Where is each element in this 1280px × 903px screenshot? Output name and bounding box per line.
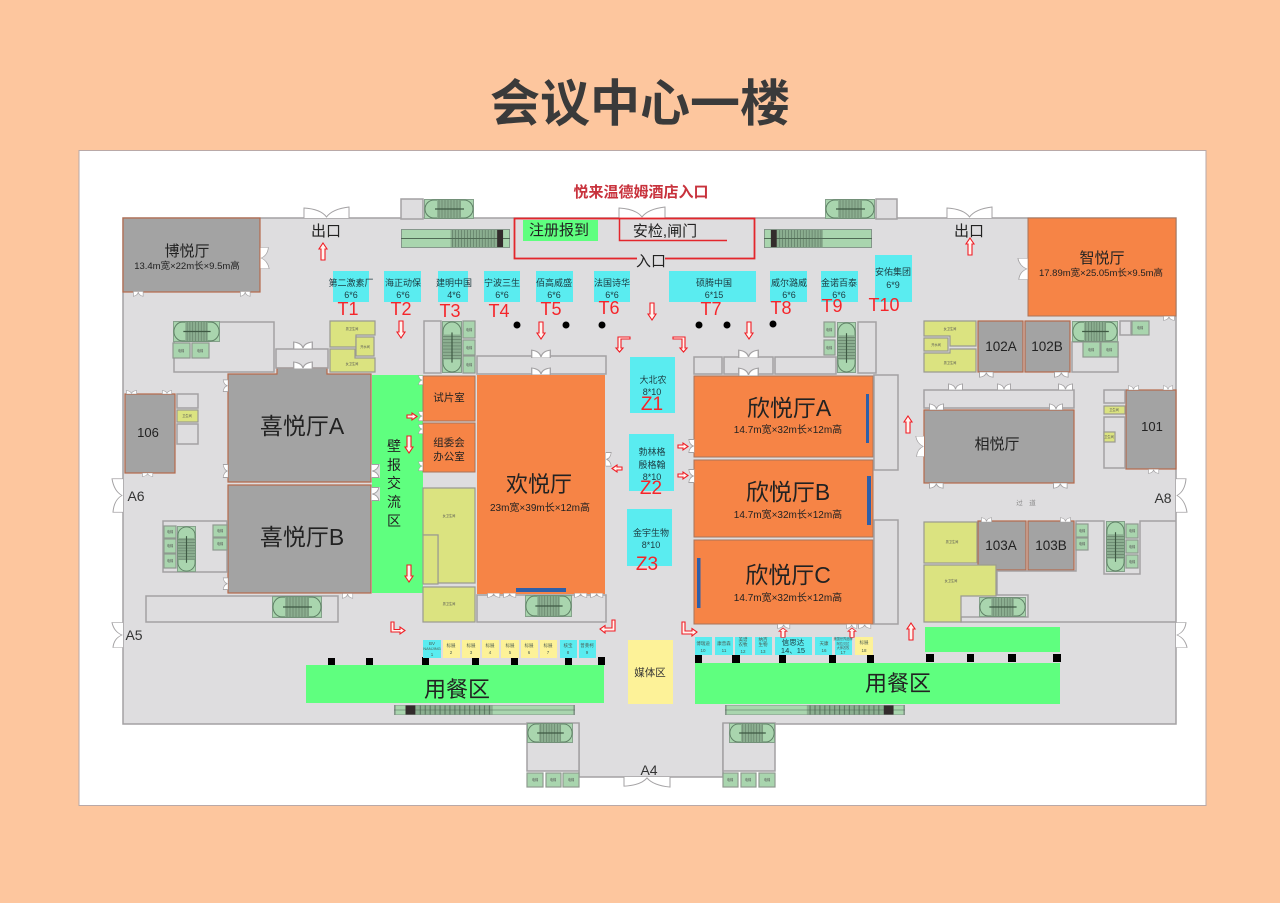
hall: 106: 106 xyxy=(137,425,159,440)
booth T4 xyxy=(484,271,520,321)
stairs and elevators: 电梯 xyxy=(1079,528,1086,533)
small booths right row: 农牧 xyxy=(738,641,748,648)
hall: 博悦厅 xyxy=(123,218,260,292)
room: 102B xyxy=(1025,321,1070,372)
small booths right row: 信思达 xyxy=(782,637,805,647)
poster exchange area: 报 xyxy=(387,457,401,473)
room: 组委会办公室 xyxy=(423,423,475,472)
hall: 喜悦厅A: 喜悦厅A xyxy=(260,413,345,439)
stairs and elevators: 电梯 xyxy=(217,528,224,533)
booth T9: 金诺百泰 xyxy=(821,277,857,288)
booth Z1: Z1 xyxy=(641,394,663,415)
hall: 欣悦厅B: 欣悦厅B xyxy=(746,479,830,505)
small booths left row: 4 xyxy=(489,650,492,655)
stairs and elevators: 电梯 xyxy=(727,777,734,782)
small booths left row: 2 xyxy=(450,650,453,655)
registration and security entrance: 注册报到 xyxy=(529,222,589,239)
room: 102A xyxy=(978,321,1023,372)
booth T10 xyxy=(868,255,912,315)
booth T3: 建明中国 xyxy=(436,277,472,288)
room: 102B: 102B xyxy=(1031,339,1063,354)
hall: 欣悦厅A: 14.7m宽×32m长×12m高 xyxy=(734,423,842,436)
booth T7: 硕腾中国 xyxy=(696,277,732,288)
booth T3: 4*6 xyxy=(447,290,461,300)
stairs and elevators: 电梯 xyxy=(826,345,833,350)
small booths left row: 3 xyxy=(470,650,473,655)
booth T9: 6*6 xyxy=(832,290,846,300)
small booths right row: 10 xyxy=(700,648,706,653)
arrows xyxy=(319,238,974,640)
booth T6: 6*6 xyxy=(605,290,619,300)
dining area left: 用餐区 xyxy=(424,677,490,702)
booth Z1 xyxy=(630,357,675,415)
exit labels: 出口 xyxy=(954,223,984,240)
room: 试片室: 试片室 xyxy=(433,391,465,404)
small booths left row: 5 xyxy=(509,650,512,655)
entrance doors and labels A4 A5 A6 A8: 过 道 xyxy=(1016,498,1036,507)
hall: 欣悦厅C: 14.7m宽×32m长×12m高 xyxy=(734,591,842,604)
stairs and elevators: 电梯 xyxy=(197,348,204,353)
room: 103A: 103A xyxy=(985,538,1017,553)
registration and security entrance: 入口 xyxy=(636,253,666,270)
booth T5: 6*6 xyxy=(547,290,561,300)
room: 102A: 102A xyxy=(985,339,1017,354)
hall: 相悦厅: 相悦厅 xyxy=(974,436,1020,453)
small booths right row: 天康 xyxy=(820,640,829,647)
stairs and elevators: 电梯 xyxy=(167,558,174,563)
registration and security entrance xyxy=(514,218,754,270)
restrooms: 卫生间 xyxy=(182,413,192,418)
restrooms: 男卫生间 xyxy=(944,360,956,365)
booth T4: 6*6 xyxy=(495,290,509,300)
stairs and elevators: 电梯 xyxy=(466,362,473,367)
hall: 博悦厅: 13.4m宽×22m长×9.5m高 xyxy=(134,260,240,272)
corridors and service rooms xyxy=(146,321,1176,771)
restrooms xyxy=(177,321,1125,622)
restrooms: 男卫生间 xyxy=(443,601,455,606)
booth Z3: Z3 xyxy=(636,554,658,575)
stairs and elevators: 电梯 xyxy=(1106,347,1113,352)
room: 101: 101 xyxy=(1141,419,1163,434)
booth T5 xyxy=(536,271,573,319)
title: 会议中心一楼 xyxy=(490,76,790,132)
small booths left row: 核宝 xyxy=(564,642,573,649)
booth T1: 6*6 xyxy=(344,290,358,300)
restrooms: 开水间 xyxy=(360,344,370,349)
stairs and elevators: 电梯 xyxy=(550,777,557,782)
top doors xyxy=(304,207,992,218)
hall: 欢悦厅 xyxy=(477,375,605,594)
restrooms: 女卫生间 xyxy=(944,326,956,331)
booth T10: 6*9 xyxy=(886,280,900,290)
hall: 欣悦厅B xyxy=(694,460,873,537)
dining area right: 用餐区 xyxy=(865,671,931,696)
small booths left row: 标展 xyxy=(506,642,515,649)
booth T8: 威尔潞威 xyxy=(771,277,807,288)
dining area left xyxy=(306,665,604,703)
booth T3 xyxy=(436,271,472,321)
booth Z1: 8*10 xyxy=(643,387,661,397)
hall: 欢悦厅: 23m宽×39m长×12m高 xyxy=(490,501,590,514)
small booths left row: 9 xyxy=(586,650,589,655)
poster exchange area: 壁 xyxy=(387,438,401,454)
booth Z1: 大北农 xyxy=(639,374,667,385)
floor base xyxy=(123,218,1176,777)
poster exchange area xyxy=(372,375,423,593)
booth T2: T2 xyxy=(390,299,412,319)
stairs and elevators: 电梯 xyxy=(167,529,174,534)
booth Z2: 8*10 xyxy=(643,472,661,482)
small doors xyxy=(126,247,1174,628)
restrooms: 女卫生间 xyxy=(945,578,957,583)
stairs and elevators: 电梯 xyxy=(745,777,752,782)
small booths right row: 18 xyxy=(861,648,867,653)
entrance doors and labels A4 A5 A6 A8 xyxy=(112,479,1187,787)
hall: 相悦厅 xyxy=(924,410,1074,483)
restrooms: 男卫生间 xyxy=(946,539,958,544)
hall: 欣悦厅C: 欣悦厅C xyxy=(745,562,831,588)
booth T2 xyxy=(384,271,421,319)
booth T7: T7 xyxy=(700,299,722,319)
media area: 媒体区 xyxy=(634,666,666,679)
room: 组委会办公室: 办公室 xyxy=(433,450,465,463)
hall: 欣悦厅C xyxy=(694,540,873,624)
small booths right row: 标展 xyxy=(860,639,869,646)
booth Z2: Z2 xyxy=(640,478,662,499)
small booths left row: 标展 xyxy=(466,642,476,649)
hall: 欣悦厅A: 欣悦厅A xyxy=(747,395,832,421)
hall: 106 xyxy=(125,394,175,473)
booth T6 xyxy=(594,271,630,318)
booth T4: T4 xyxy=(488,301,510,321)
booth Z2 xyxy=(629,434,674,499)
restrooms: 卫生间 xyxy=(1104,434,1114,439)
dining area right xyxy=(695,663,1060,704)
small booths left row: 标展 xyxy=(486,642,495,649)
stairs and elevators: 电梯 xyxy=(1088,347,1095,352)
pillars xyxy=(328,320,1061,665)
booth Z3: 8*10 xyxy=(642,540,660,550)
restrooms: 开水间 xyxy=(931,342,941,347)
hall: 智悦厅: 17.89m宽×25.05m长×9.5m高 xyxy=(1039,267,1163,279)
small booths left row: NANJING xyxy=(423,646,441,651)
booth T1: 第二激素厂 xyxy=(328,277,374,288)
room: 103B: 103B xyxy=(1035,538,1067,553)
room: 103B xyxy=(1028,521,1074,570)
exit labels: 出口 xyxy=(311,223,341,240)
registration and security entrance: 安检,闸门 xyxy=(633,223,697,240)
booth Z3: 金宇生物 xyxy=(633,527,669,538)
poster exchange area: 流 xyxy=(387,494,401,510)
small booths left row: 6 xyxy=(528,650,531,655)
booth T1 xyxy=(328,271,374,319)
booth T1: T1 xyxy=(337,299,359,319)
booth T9 xyxy=(821,271,858,316)
small booths right row: 康普森 xyxy=(717,640,731,647)
hall: 欣悦厅B: 14.7m宽×32m长×12m高 xyxy=(734,508,842,521)
hall: 喜悦厅A xyxy=(228,368,371,482)
small booths left row: 普莱柯 xyxy=(580,642,594,649)
stairs and elevators: 电梯 xyxy=(466,327,473,332)
booth T7 xyxy=(669,271,756,319)
booth Z2: 勃林格 xyxy=(638,446,666,457)
small booths right row: 14、15 xyxy=(781,646,805,655)
hotel entrance label: 悦来温德姆酒店入口 xyxy=(573,183,709,201)
small booths right row: 大师农牧 xyxy=(837,645,850,650)
stairs and elevators: 电梯 xyxy=(1079,541,1086,546)
small booths right row: 美谱 xyxy=(738,636,748,643)
small booths left row: BV xyxy=(429,641,435,646)
stairs and elevators: 电梯 xyxy=(1129,559,1136,564)
media area xyxy=(628,640,673,704)
small booths left row: 1 xyxy=(431,652,434,657)
stairs and elevators: 电梯 xyxy=(217,541,224,546)
stairs and elevators: 电梯 xyxy=(178,348,185,353)
booth T10: T10 xyxy=(868,295,900,315)
booth T6: T6 xyxy=(598,298,620,318)
stairs and elevators: 电梯 xyxy=(568,777,575,782)
room: 试片室 xyxy=(423,376,475,421)
dining area strip xyxy=(925,627,1060,652)
small booths right row: 纳百 xyxy=(758,636,768,643)
restrooms: 卫生间 xyxy=(1109,407,1119,412)
room: 组委会办公室: 组委会 xyxy=(433,436,465,449)
small booths left row: 标展 xyxy=(544,642,553,649)
booth T8 xyxy=(770,271,807,318)
small booths right row: 博瑞迪 xyxy=(696,640,710,647)
booth T7: 6*15 xyxy=(705,290,723,300)
booth T6: 法国诗华 xyxy=(594,277,630,288)
booth T5: 佰高威盛 xyxy=(536,277,572,288)
top stairs and escalators xyxy=(401,199,897,248)
small booths right row: 美国世界品牌 xyxy=(833,636,853,641)
stairs and elevators: 电梯 xyxy=(764,777,771,782)
hall: 欣悦厅A xyxy=(694,376,873,457)
hall: 智悦厅: 智悦厅 xyxy=(1079,249,1125,267)
booth T8: 6*6 xyxy=(782,290,796,300)
booth T4: 宁波三生 xyxy=(484,277,520,288)
poster exchange area: 交 xyxy=(387,475,401,491)
booth Z2: 殷格翰 xyxy=(638,459,666,470)
booth Z3 xyxy=(627,509,672,575)
hall: 智悦厅 xyxy=(1028,218,1176,316)
small booths right row: 16 xyxy=(821,648,827,653)
hall: 博悦厅: 博悦厅 xyxy=(164,243,210,260)
stairs and elevators: 电梯 xyxy=(532,777,539,782)
small booths left row: 8 xyxy=(567,650,570,655)
booth T8: T8 xyxy=(770,298,792,318)
small booths left row xyxy=(423,640,596,658)
entrance doors and labels A4 A5 A6 A8: A5 xyxy=(125,627,143,643)
small booths left row: 标展 xyxy=(446,642,456,649)
booth T2: 海正动保 xyxy=(385,277,421,288)
stairs and elevators xyxy=(164,321,1149,787)
exit labels xyxy=(311,223,984,240)
stairs and elevators: 电梯 xyxy=(826,327,833,332)
stairs and elevators: 电梯 xyxy=(1137,325,1144,330)
entrance doors and labels A4 A5 A6 A8: A6 xyxy=(127,488,145,504)
small booths right row: 13 xyxy=(760,649,766,654)
small booths left row: 标展 xyxy=(524,642,534,649)
room: 103A xyxy=(978,521,1026,570)
small booths right row: 17 xyxy=(840,650,846,655)
booth T3: T3 xyxy=(439,301,461,321)
restrooms: 女卫生间 xyxy=(346,361,358,366)
booth T5: T5 xyxy=(540,299,562,319)
small booths right row xyxy=(695,636,873,655)
floor plan card xyxy=(79,150,1206,806)
stairs and elevators: 电梯 xyxy=(1129,544,1136,549)
small booths left row: 7 xyxy=(547,650,550,655)
small booths right row: 阿拉贝拉 xyxy=(837,641,850,646)
poster exchange area: 区 xyxy=(387,513,401,529)
stairs and elevators: 电梯 xyxy=(466,345,473,350)
entrance doors and labels A4 A5 A6 A8: A4 xyxy=(640,762,658,778)
hall: 喜悦厅B xyxy=(228,485,371,593)
stairs and elevators: 电梯 xyxy=(167,543,174,548)
restrooms: 男卫生间 xyxy=(346,326,358,331)
small booths right row: 生物 xyxy=(758,641,768,648)
small booths right row: 11 xyxy=(722,648,727,653)
hall: 喜悦厅B: 喜悦厅B xyxy=(260,524,344,550)
booth T2: 6*6 xyxy=(396,290,410,300)
room: 101 xyxy=(1126,390,1176,469)
booth T9: T9 xyxy=(821,296,843,316)
booth T10: 安佑集团 xyxy=(875,266,911,277)
entrance doors and labels A4 A5 A6 A8: A8 xyxy=(1154,490,1172,506)
hall: 欢悦厅: 欢悦厅 xyxy=(506,472,572,497)
stairs and elevators: 电梯 xyxy=(1129,528,1136,533)
small booths right row: 12 xyxy=(740,649,746,654)
restrooms: 女卫生间 xyxy=(443,513,455,518)
